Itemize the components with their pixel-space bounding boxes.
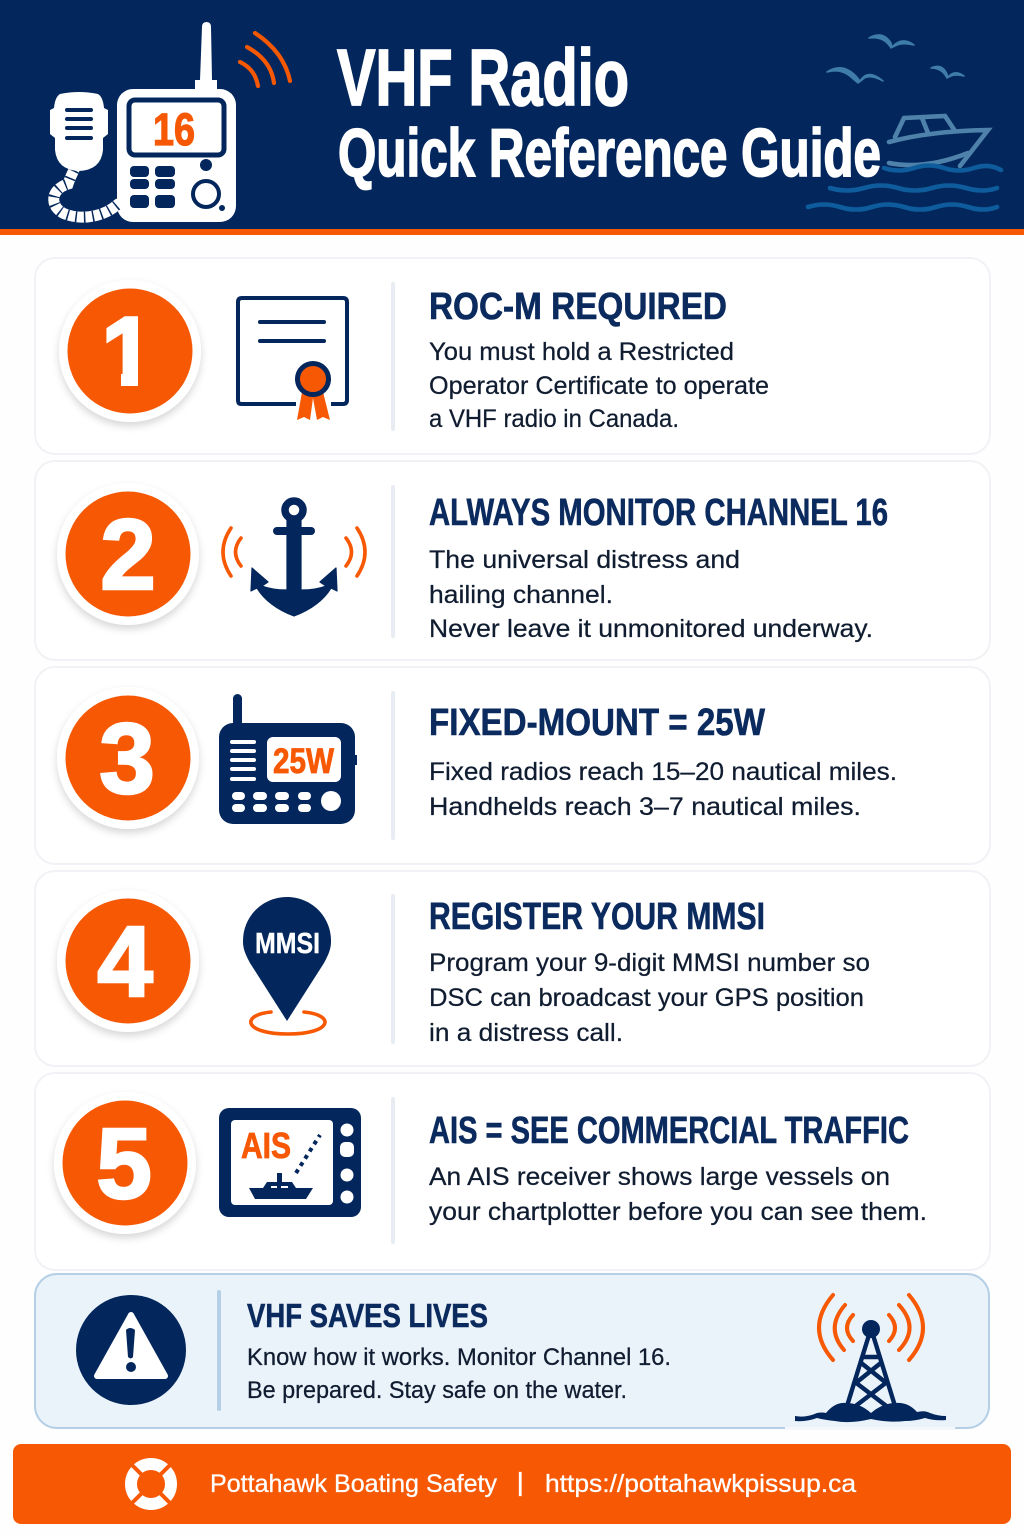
number badge 1 — [59, 280, 201, 422]
heading: REGISTER YOUR MMSI — [429, 896, 765, 938]
header banner — [0, 0, 1024, 235]
icon: handheld radio with microphone — [50, 22, 236, 222]
icon: warning triangle — [76, 1295, 186, 1405]
icon: anchor with signal — [223, 501, 365, 616]
icon: radio tower on water — [785, 1295, 955, 1430]
body text — [247, 1344, 671, 1404]
icon: seagulls — [827, 35, 964, 83]
body text: Fixed radios reach 15–20 nautical miles. — [429, 758, 897, 786]
body text — [429, 1163, 927, 1226]
panel: 5 AIS — [35, 1073, 990, 1270]
number badge 3 — [57, 687, 199, 829]
number badge 4 — [57, 890, 199, 1032]
icon: handheld radio with microphone: 16 — [153, 104, 195, 155]
body text: You must hold a Restricted — [429, 338, 734, 366]
heading: ROC-M REQUIRED — [429, 286, 727, 328]
body text: Operator Certificate to operate — [429, 372, 769, 400]
icon: certificate — [238, 298, 347, 420]
body text: a VHF radio in Canada. — [429, 405, 679, 433]
callout: VHF saves lives — [35, 1274, 989, 1430]
icon: AIS chartplotter — [219, 1108, 361, 1217]
icon: fixed-mount radio: 25W — [273, 742, 334, 781]
icon: lifebuoy — [131, 1464, 171, 1504]
icon: boat on waves — [808, 116, 1001, 210]
heading: VHF SAVES LIVES — [247, 1297, 488, 1334]
number badge 5: 5 — [96, 1108, 152, 1220]
body text: your chartplotter before you can see them. — [429, 1198, 927, 1226]
footer text: Pottahawk Boating Safety — [210, 1470, 497, 1498]
body text: DSC can broadcast your GPS position — [429, 984, 864, 1012]
number badge 4: 4 — [97, 906, 153, 1018]
body text: Never leave it unmonitored underway. — [429, 615, 873, 643]
title — [337, 33, 881, 191]
footer text: https://pottahawkpissup.ca — [545, 1470, 856, 1498]
body text: hailing channel. — [429, 581, 613, 609]
heading: ALWAYS MONITOR CHANNEL 16 — [429, 492, 888, 534]
footer bar — [13, 1444, 1011, 1524]
body text: Know how it works. Monitor Channel 16. — [247, 1344, 671, 1371]
heading: FIXED-MOUNT = 25W — [429, 702, 765, 744]
body text — [429, 338, 769, 433]
body text: Be prepared. Stay safe on the water. — [247, 1377, 627, 1404]
icon: MMSI location pin — [243, 897, 331, 1034]
panel: 3 fixed-mount 25W — [35, 667, 990, 864]
number badge 3: 3 — [99, 703, 155, 815]
number badge 2 — [57, 483, 199, 625]
title: VHF Radio — [337, 33, 629, 122]
panel: 4 register MMSI — [35, 871, 990, 1066]
body text: The universal distress and — [429, 546, 740, 574]
body text: Handhelds reach 3–7 nautical miles. — [429, 793, 861, 821]
body text: Program your 9-digit MMSI number so — [429, 949, 870, 977]
icon: AIS chartplotter: AIS — [241, 1125, 291, 1166]
number badge 5 — [54, 1092, 196, 1234]
body text: in a distress call. — [429, 1019, 623, 1047]
body text: An AIS receiver shows large vessels on — [429, 1163, 890, 1191]
number badge 2: 2 — [100, 499, 156, 611]
panel: 1 ROC-M required — [35, 258, 990, 454]
body text — [429, 758, 897, 821]
number badge 1: 1 — [102, 297, 156, 407]
icon: radio signal waves — [240, 33, 290, 86]
footer text — [210, 1470, 856, 1498]
icon: MMSI location pin: MMSI — [255, 928, 320, 960]
body text — [429, 949, 870, 1047]
panel: 2 monitor channel 16 — [35, 461, 990, 660]
body text — [429, 546, 873, 643]
icon: fixed-mount radio — [219, 694, 357, 824]
